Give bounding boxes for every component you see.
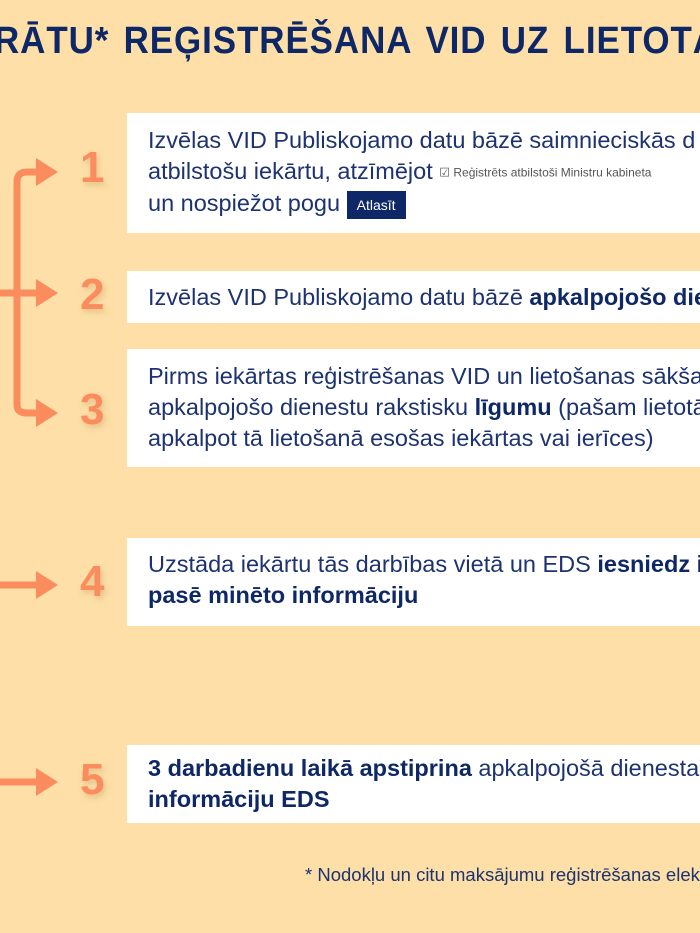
step 3 box [127,349,700,467]
step 1 box: un nospiežot pogu [148,190,340,216]
connector arrows [0,158,58,796]
number 4: 4 [80,557,104,606]
number 3: 3 [80,385,104,434]
number 2: 2 [80,270,104,319]
step 5 box: informāciju EDS [148,786,330,812]
number 5: 5 [80,755,104,804]
step 4 box [127,538,700,626]
step 3 box: apkalpot tā lietošanā esošas iekārtas vai ierīces) [148,425,654,451]
step 5 box [127,745,700,823]
step 2 box [127,271,700,323]
step 4 box: pasē minēto informāciju [148,582,418,608]
step 5 box: 3 darbadienu laikā apstiprina apkalpojošā dienesta [148,755,699,781]
step 1 box: Izvēlas VID Publiskojamo datu bāzē saimnieciskās d [148,127,695,153]
step 1 box [127,113,700,233]
step 1 box: atbilstošu iekārtu, atzīmējot ☑ Reģistrēts atbilstoši Ministru kabineta [148,158,651,184]
step 1 box: Atlasīt [357,197,396,213]
number 1: 1 [80,143,104,192]
